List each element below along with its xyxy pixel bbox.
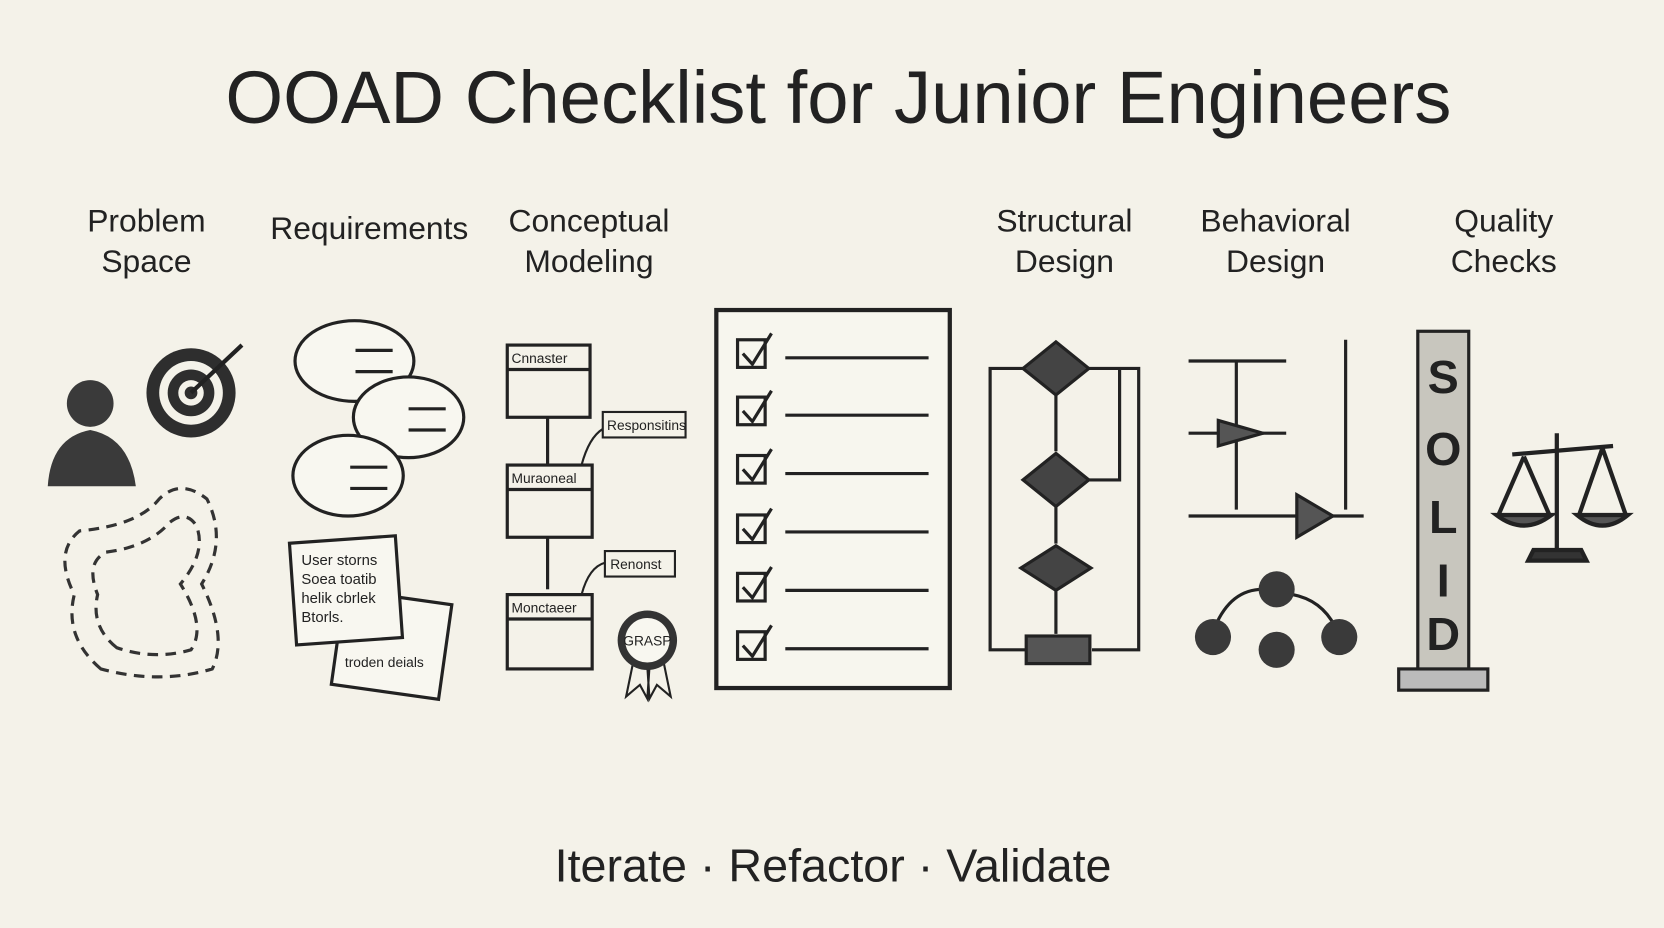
heading: behavioral design (1200, 202, 1351, 279)
text: Monctaeer (512, 601, 577, 616)
icon: SOLID pillar (1399, 331, 1488, 690)
icon: SOLID pillar: D (1426, 608, 1460, 660)
icon: SOLID pillar: O (1425, 423, 1461, 475)
diagram: sequence / behavior (1189, 340, 1364, 626)
icon: SOLID pillar: S (1428, 351, 1459, 403)
heading: conceptual modeling (508, 202, 669, 279)
icon: sticky notes: helik cbrlek (301, 591, 376, 607)
text: Muraoneal (512, 471, 577, 486)
icon: sticky notes: troden deials (345, 655, 424, 670)
title: OOAD Checklist for Junior Engineers (225, 56, 1451, 139)
icon: GRASP badge: GRASP (623, 634, 671, 649)
heading: quality checks (1451, 202, 1557, 279)
icon: sticky notes (289, 536, 452, 699)
heading: requirements: Requirements (270, 210, 468, 246)
diagram: flowchart (990, 342, 1139, 664)
text: Renonst (610, 557, 662, 572)
heading: quality checks: Quality (1454, 202, 1553, 238)
heading: structural design: Design (1015, 243, 1114, 279)
icon: SOLID pillar: I (1437, 555, 1450, 607)
footer: Iterate · Refactor · Validate (555, 839, 1112, 891)
icon: balance scale (1496, 433, 1628, 561)
text: Responsitins (607, 418, 686, 433)
checklist card (716, 310, 950, 688)
icon: sticky notes: Soea toatib (301, 572, 377, 588)
heading: problem space: Problem (87, 202, 206, 238)
icon: person (48, 380, 136, 486)
heading: problem space (87, 202, 206, 279)
icon: GRASP badge (618, 611, 677, 699)
icon: dashed path (65, 488, 218, 677)
heading: structural design: Structural (996, 202, 1132, 238)
diagram: conceptual classes (507, 345, 686, 669)
text: Cnnaster (512, 351, 568, 366)
icon: target with arrow (146, 345, 242, 437)
icon: SOLID pillar: L (1429, 491, 1458, 543)
icon: speech bubbles (293, 321, 464, 516)
icon: sticky notes: Btorls. (301, 610, 344, 626)
heading: conceptual modeling: Conceptual (508, 202, 669, 238)
heading: behavioral design: Design (1226, 243, 1325, 279)
heading: quality checks: Checks (1451, 243, 1557, 279)
icon: sticky notes: User storns (301, 553, 377, 569)
heading: problem space: Space (101, 243, 192, 279)
heading: behavioral design: Behavioral (1200, 202, 1351, 238)
heading: structural design (996, 202, 1132, 279)
heading: conceptual modeling: Modeling (524, 243, 654, 279)
